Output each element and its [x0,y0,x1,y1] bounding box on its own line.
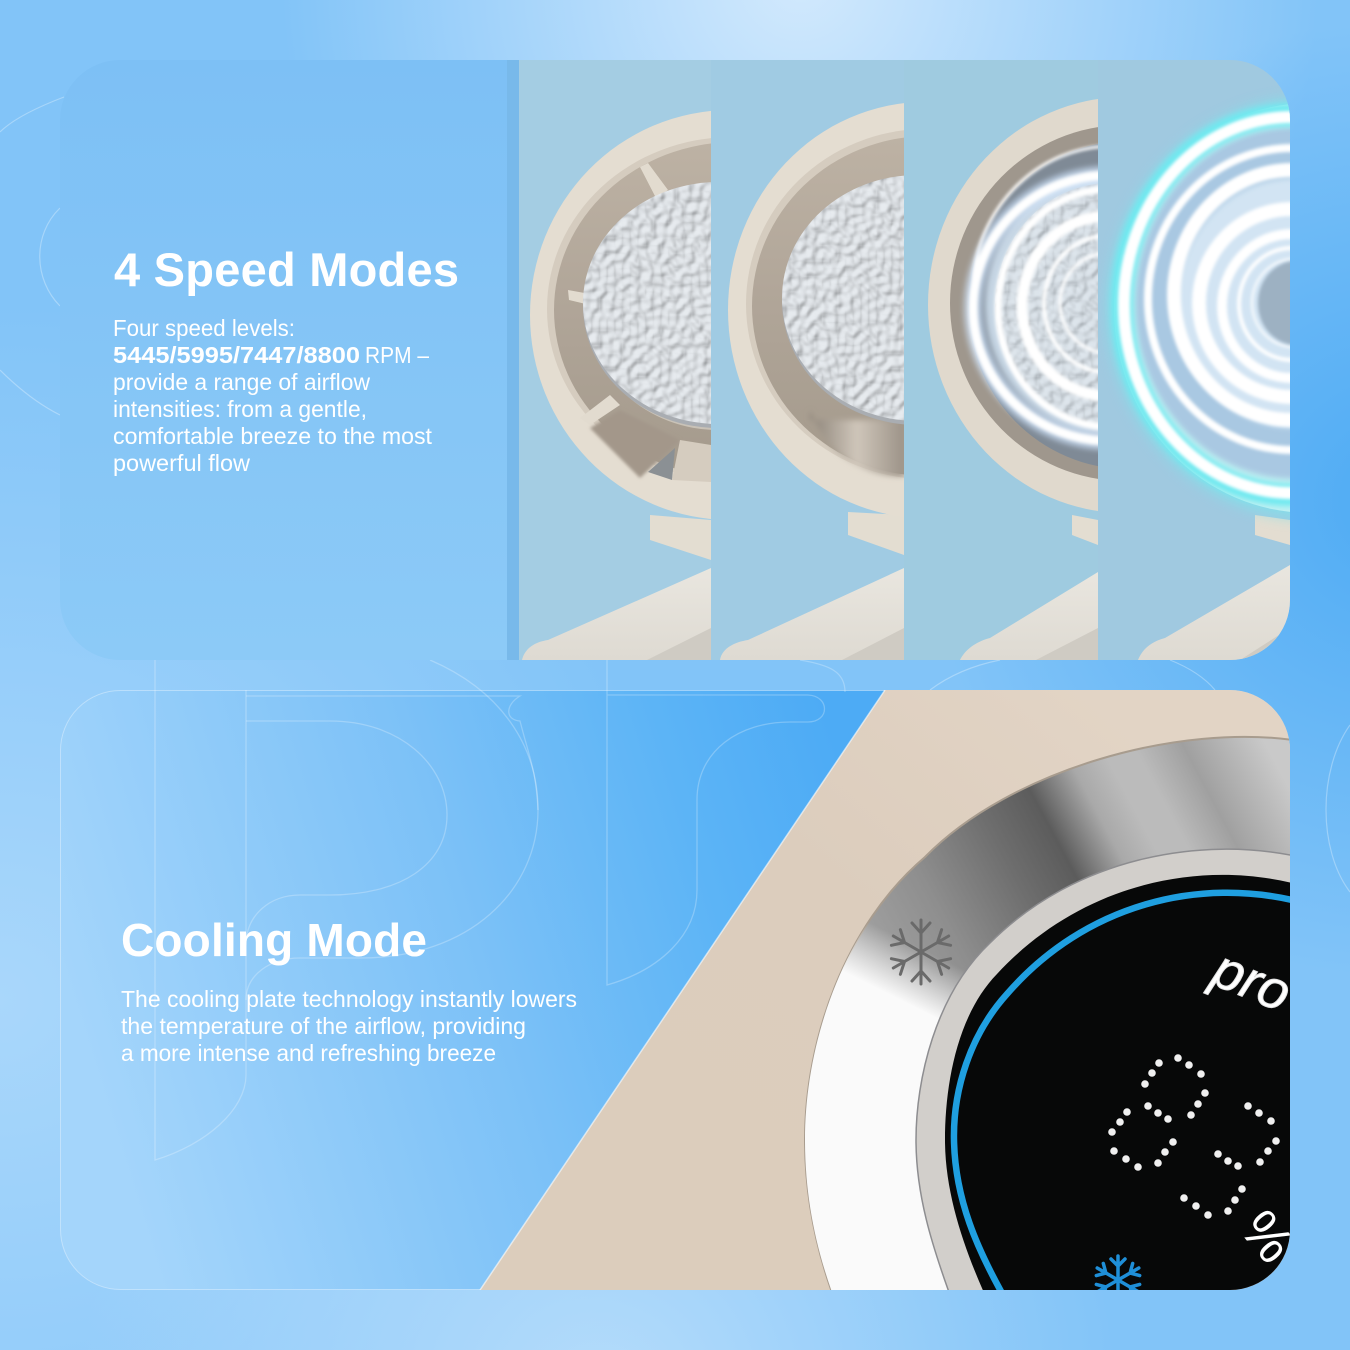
text block: speed description [113,315,432,476]
text block: speed description: provide a range of airflow [113,369,371,395]
text block: speed description: intensities: from a gentle, [113,396,367,422]
text block: speed description: RPM – [365,342,430,368]
image: speed 1 fan [519,60,711,660]
image: speed 3 fan [904,60,1098,660]
heading: 4 speed modes: 4 Speed Modes [114,243,459,296]
decorative letter outlines [155,660,845,1160]
panel background [60,690,1290,1290]
text block: speed description: comfortable breeze to the most [113,423,432,449]
pro logo: pro [1203,938,1299,1023]
text block: cooling description: The cooling plate technology instantly lowers [121,986,577,1012]
beige dryer body [480,690,1306,1304]
metal ring [805,737,1300,1295]
text block: cooling description: the temperature of the airflow, providing [121,1013,526,1039]
text block: speed description: powerful flow [113,450,251,476]
blue progress ring [954,893,1300,1295]
heading: cooling mode: Cooling Mode [121,914,427,966]
icon: blue snowflake [1094,1254,1142,1290]
text block: cooling description [121,986,577,1066]
panel: cooling mode [60,660,1306,1304]
text block: speed description: 5445/5995/7447/8800 [113,342,360,368]
panel: 4 speed modes [60,60,1350,660]
image: speed 4 fan [1098,60,1290,660]
image: speed 2 fan [711,60,904,660]
digit display: 83 [1108,1054,1280,1219]
percent sign: % [1229,1199,1306,1274]
black display [945,875,1300,1295]
text panel background [60,60,520,660]
text block: speed description: Four speed levels: [113,315,295,341]
display bezel [916,849,1300,1295]
icon: grey snowflake on ring [889,920,953,984]
text block: cooling description: a more intense and refreshing breeze [121,1040,496,1066]
